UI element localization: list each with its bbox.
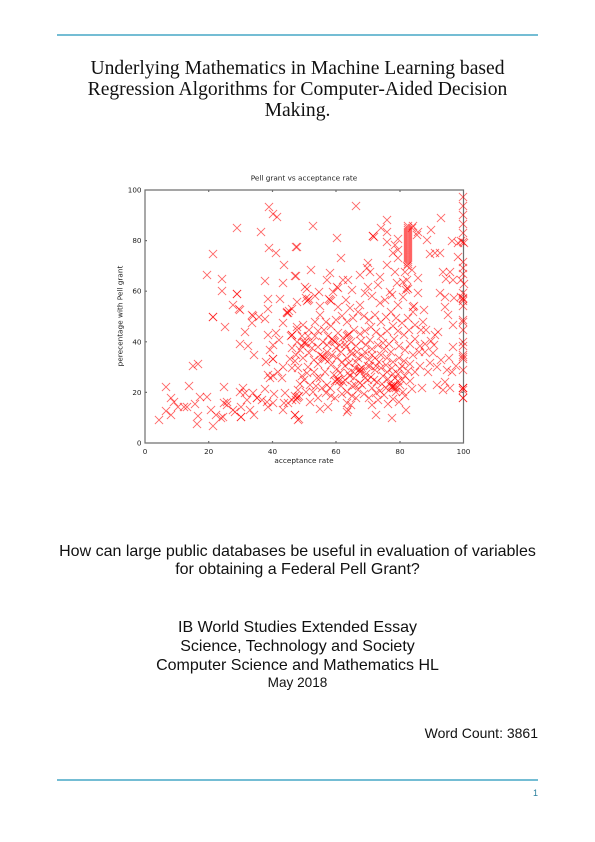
data points: red crosses [159, 197, 464, 426]
title: Underlying Mathematics in Machine Learning based [90, 58, 505, 79]
date: May 2018 [268, 675, 327, 690]
x axis tick labels: 40 [268, 447, 277, 456]
research question: for obtaining a Federal Pell Grant? [175, 561, 420, 578]
x axis tick labels: 20 [204, 447, 214, 456]
essay details [156, 619, 439, 674]
title [88, 58, 507, 121]
x axis tick labels: 80 [395, 447, 405, 456]
x axis label: acceptance rate [274, 456, 334, 465]
bottom rule [57, 779, 538, 781]
word count: Word Count: 3861 [425, 725, 538, 741]
y axis tick labels: 100 [128, 186, 142, 194]
chart title: Pell grant vs acceptance rate [251, 174, 358, 182]
x axis tick labels [143, 447, 471, 456]
y axis tick labels: 60 [132, 287, 142, 296]
research question [59, 543, 536, 578]
top rule [57, 34, 538, 36]
x axis tick labels: 0 [143, 447, 148, 456]
y axis tick labels [128, 186, 142, 448]
essay details: IB World Studies Extended Essay [178, 619, 417, 636]
plot frame and ticks [145, 190, 464, 443]
y axis tick labels: 40 [132, 337, 142, 346]
y axis tick labels: 80 [132, 236, 142, 245]
research question: How can large public databases be useful in evaluation of variables [59, 543, 536, 560]
page number: 1 [533, 788, 538, 798]
title: Regression Algorithms for Computer-Aided Decision [88, 79, 507, 100]
title: Making. [265, 100, 330, 121]
y axis label: perecentage with Pell grant [116, 265, 124, 366]
y axis tick labels: 20 [132, 388, 142, 397]
x axis tick labels: 60 [331, 447, 341, 456]
y axis tick labels: 0 [137, 438, 142, 448]
x axis tick labels: 100 [457, 447, 471, 456]
essay details: Science, Technology and Society [180, 638, 415, 655]
essay details: Computer Science and Mathematics HL [156, 657, 439, 674]
